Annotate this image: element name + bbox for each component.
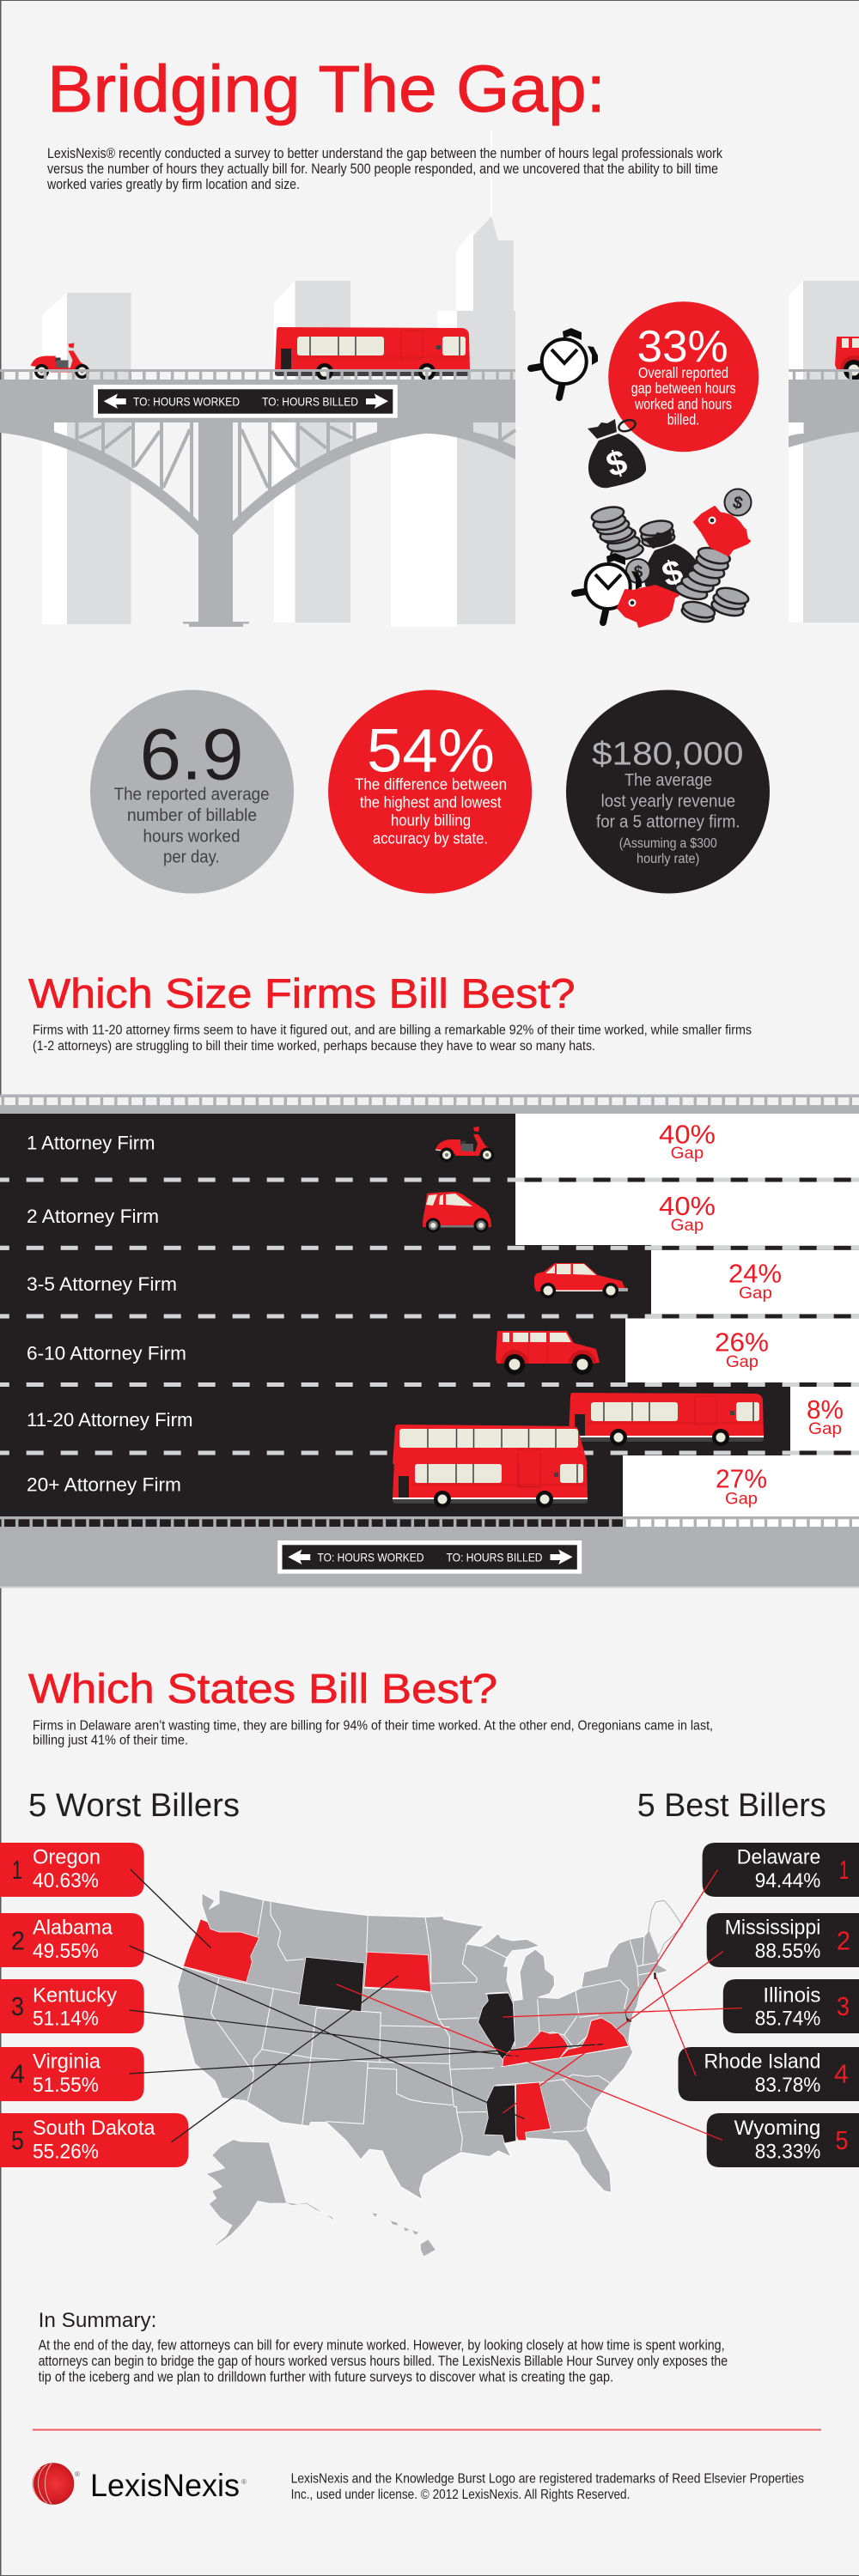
- road sign: hours worked to hours billed: TO: HOURS WORKED: [133, 395, 240, 409]
- stat circle: 54% difference: hourly billing: [391, 811, 471, 829]
- panel: best biller Wyoming: [707, 2113, 859, 2167]
- panel: best biller Illinois: Illinois: [763, 1984, 820, 2007]
- road sign: hours worked to hours billed: TO: HOURS BILLED: [262, 395, 358, 409]
- illustration: bridge right section: [789, 369, 859, 447]
- icon: sedan: [534, 1263, 628, 1298]
- panel: best biller Delaware: [703, 1843, 859, 1897]
- panel: best biller Mississippi: 88.55%: [755, 1940, 820, 1963]
- stat circle: 33% gap: gap between hours: [631, 380, 736, 397]
- icon: alarm clock: [531, 328, 598, 398]
- panel: worst biller Oregon: [0, 1843, 144, 1897]
- stat circle: 6.9 billable hours: per day.: [163, 847, 220, 866]
- stat circle: $180,000 lost revenue: lost yearly revenue: [601, 791, 735, 811]
- text: state summary: [33, 1718, 713, 1748]
- map: state borders: [183, 1900, 659, 2151]
- stat circle: 54% difference: the highest and lowest: [360, 793, 502, 811]
- intro text: [46, 146, 723, 192]
- stat circle: 33% gap: billed.: [667, 411, 699, 428]
- icon: pile of coins, clock, money bag and piggy banks: $: [634, 563, 643, 581]
- illustration: city skyline buildings: [42, 131, 859, 627]
- state: South Dakota: [364, 1952, 431, 1992]
- row labels: 1 Attorney Firm: [27, 1132, 155, 1154]
- gap labels: 8%: [807, 1394, 844, 1425]
- icon: money bag: $: [602, 443, 631, 484]
- stat circle: 54% difference: 54%: [367, 717, 495, 785]
- stat circle: 6.9 billable hours: number of billable: [127, 805, 257, 825]
- panel: worst biller Virginia: [0, 2047, 144, 2101]
- road sign: hours worked to hours billed: TO: HOURS WORKED: [318, 1551, 424, 1564]
- row labels: [27, 1132, 192, 1496]
- panel: best biller Illinois: [723, 1979, 859, 2033]
- illustration: bridge left section: [0, 369, 515, 627]
- logo: LexisNexis: ®: [75, 2470, 80, 2478]
- heading: 5 worst billers: 5 Worst Billers: [28, 1788, 240, 1824]
- stat circle: $180,000 lost revenue: for a 5 attorney firm.: [596, 812, 740, 832]
- stat circle: 6.9 billable hours: [90, 690, 294, 893]
- panel: best biller Mississippi: [707, 1913, 859, 1967]
- text: summary paragraph: [39, 2338, 728, 2385]
- panel: worst biller South Dakota: South Dakota: [33, 2117, 155, 2140]
- icon: scooter: [436, 1127, 495, 1163]
- map: Alaska: [206, 2140, 335, 2246]
- logo globe: [33, 2463, 74, 2505]
- intro text: versus the number of hours they actually bill for. Nearly 500 people responded, and we uncovered that the ability to bill time: [47, 161, 718, 177]
- stat circle: 54% difference: accuracy by state.: [373, 829, 488, 847]
- panel: worst biller Oregon: Oregon: [33, 1846, 101, 1868]
- panel: best biller Delaware: 1: [839, 1855, 849, 1885]
- gap labels: Gap: [671, 1217, 704, 1235]
- top road railing: [0, 1094, 859, 1114]
- panel: best biller Mississippi: 2: [837, 1925, 850, 1956]
- icon: money bag: [588, 418, 646, 488]
- icon: bus on bridge: [275, 327, 470, 380]
- stat circle: 6.9 billable hours: hours worked: [143, 826, 241, 846]
- text: firm size summary: [33, 1024, 752, 1054]
- gap labels: 26%: [715, 1327, 769, 1357]
- state: Kentucky: [503, 2031, 569, 2067]
- panel: worst biller South Dakota: [0, 2113, 188, 2167]
- gap labels: Gap: [725, 1491, 758, 1509]
- row labels: 11-20 Attorney Firm: [27, 1409, 192, 1431]
- heading: in summary: In Summary:: [39, 2309, 156, 2332]
- panel: best biller Mississippi: Mississippi: [725, 1917, 820, 1940]
- gap labels: Gap: [726, 1353, 758, 1371]
- icon: small car: [423, 1192, 491, 1233]
- stat circle: 6.9 billable hours: 6.9: [140, 714, 244, 795]
- state: Oregon: [183, 1919, 259, 1982]
- state: Illinois: [478, 1993, 515, 2059]
- state: Delaware: [624, 2008, 632, 2022]
- panel: best biller Delaware: Delaware: [737, 1846, 820, 1868]
- icon: pile of coins, clock, money bag and piggy banks: $: [658, 553, 687, 594]
- panel: best biller Rhode Island: 83.78%: [755, 2074, 820, 2097]
- panel: worst biller South Dakota: 55.26%: [33, 2141, 99, 2164]
- stat circle: $180,000 lost revenue: $180,000: [592, 737, 744, 773]
- heading: which states bill best: Which States Bill Best?: [28, 1666, 497, 1712]
- panel: worst biller Oregon: 40.63%: [33, 1869, 99, 1893]
- lower road deck: [0, 1516, 859, 1589]
- stat circle: $180,000 lost revenue: [566, 690, 770, 893]
- map: United States: [178, 1890, 683, 2256]
- row labels: 2 Attorney Firm: [27, 1206, 159, 1227]
- gap labels: Gap: [739, 1285, 772, 1303]
- panel: best biller Illinois: 3: [837, 1991, 850, 2021]
- map: Maine outline: [649, 1900, 683, 1956]
- gap labels: Gap: [671, 1145, 704, 1163]
- panel: best biller Delaware: 94.44%: [755, 1869, 820, 1893]
- text: trademark notice: Inc., used under license. © 2012 LexisNexis. All Rights Reserved.: [291, 2488, 630, 2502]
- panel: worst biller Alabama: [0, 1913, 144, 1967]
- text: summary paragraph: tip of the iceberg and we plan to drilldown further with future surveys to discover what is creating the gap.: [39, 2369, 613, 2385]
- gap labels: 40%: [659, 1120, 716, 1150]
- road chart: gap by firm size: [0, 1094, 859, 1589]
- panel: best biller Rhode Island: 4: [834, 2059, 849, 2088]
- stat circle: 54% difference: [328, 690, 532, 893]
- icon: bus: [569, 1393, 764, 1446]
- logo: LexisNexis: LexisNexis: [90, 2468, 240, 2503]
- stat circle: $180,000 lost revenue: (Assuming a $300: [619, 836, 717, 851]
- gap labels: 27%: [716, 1464, 767, 1494]
- icon: pile of coins, clock, money bag and piggy banks: [575, 489, 752, 627]
- row labels: 6-10 Attorney Firm: [27, 1342, 186, 1364]
- panel: best biller Rhode Island: Rhode Island: [704, 2050, 820, 2073]
- panel: worst biller Kentucky: [0, 1979, 144, 2033]
- text: firm size summary: (1-2 attorneys) are struggling to bill their time worked, perhaps because they have to wear so many hats.: [33, 1039, 595, 1054]
- logo: LexisNexis: [33, 2463, 247, 2505]
- map: Hawaii: [372, 2213, 436, 2256]
- stat circle: $180,000 lost revenue: The average: [624, 770, 712, 790]
- state: Virginia: [560, 2018, 629, 2058]
- row bars: hours billed: [0, 1114, 790, 1516]
- gap labels: 40%: [659, 1191, 716, 1221]
- heading: which size firms bill best: Which Size Firms Bill Best?: [28, 970, 576, 1017]
- state: Rhode Island: [654, 1972, 656, 1979]
- text: summary paragraph: attorneys can begin to bridge the gap of hours worked versus hours billed. The LexisNexis Billable Hour Survey only exposes the: [39, 2354, 728, 2369]
- icon: scooter on bridge: [31, 343, 89, 379]
- text: summary paragraph: At the end of the day, few attorneys can bill for every minute worked. However, by looking closely at how time is spent working,: [39, 2338, 725, 2354]
- intro text: worked varies greatly by firm location and size.: [46, 177, 300, 192]
- gap labels: Gap: [808, 1420, 842, 1438]
- row labels: 20+ Attorney Firm: [27, 1473, 181, 1496]
- panel: worst biller Alabama: Alabama: [33, 1917, 113, 1940]
- road sign: hours worked to hours billed: [277, 1540, 582, 1574]
- icon: pile of coins, clock, money bag and piggy banks: $: [731, 493, 745, 513]
- title: Bridging The Gap:: [47, 52, 606, 126]
- heading: 5 best billers: 5 Best Billers: [637, 1788, 826, 1824]
- state: Alabama: [516, 2082, 551, 2141]
- panel: worst biller Kentucky: 3: [11, 1991, 24, 2021]
- panel: worst biller Virginia: 4: [10, 2059, 25, 2088]
- gap labels: [659, 1120, 844, 1509]
- panel: worst biller Kentucky: 51.14%: [33, 2008, 99, 2031]
- panel: best biller Wyoming: 5: [835, 2125, 849, 2155]
- stat circle: 6.9 billable hours: The reported average: [114, 785, 270, 805]
- panel: best biller Illinois: 85.74%: [755, 2008, 820, 2031]
- text: state summary: billing just 41% of their time.: [33, 1734, 188, 1748]
- panel: worst biller South Dakota: 5: [11, 2125, 24, 2155]
- text: firm size summary: Firms with 11-20 attorney firms seem to have it figured out, and are billing a remarkable 92% of their time worked, while smaller firms: [33, 1024, 752, 1038]
- icon: van: [496, 1331, 600, 1375]
- road sign: hours worked to hours billed: TO: HOURS BILLED: [447, 1551, 543, 1564]
- panel: worst biller Kentucky: Kentucky: [33, 1984, 117, 2007]
- icon: double decker bus: [393, 1425, 588, 1508]
- intro text: LexisNexis® recently conducted a survey to better understand the gap between the number of hours legal professionals work: [47, 146, 723, 161]
- icon: partial van on right bridge: [835, 337, 859, 380]
- map base: contiguous states: [178, 1890, 668, 2200]
- row labels: 3-5 Attorney Firm: [27, 1273, 177, 1295]
- state: Mississippi: [484, 2085, 516, 2143]
- stat circle: 54% difference: The difference between: [355, 775, 507, 793]
- panel: worst biller Oregon: 1: [12, 1855, 22, 1885]
- gap labels: 24%: [728, 1258, 782, 1288]
- stat circle: 33% gap: 33%: [637, 322, 728, 372]
- text: state summary: Firms in Delaware aren’t wasting time, they are billing for 94% of their time worked. At the other end, Oregonians came in last,: [33, 1718, 713, 1733]
- stat circle: 33% gap: worked and hours: [634, 396, 732, 413]
- stat circle: 33% gap: [608, 301, 758, 452]
- panel: worst biller Virginia: Virginia: [33, 2050, 101, 2073]
- panel: worst biller Alabama: 49.55%: [33, 1940, 99, 1963]
- stat circle: 33% gap: Overall reported: [638, 364, 728, 381]
- panel: best biller Wyoming: 83.33%: [755, 2141, 820, 2164]
- panel: worst biller Alabama: 2: [11, 1925, 25, 1956]
- panel: best biller Wyoming: Wyoming: [734, 2117, 820, 2140]
- state: Wyoming: [299, 1957, 364, 2012]
- stat circle: $180,000 lost revenue: hourly rate): [637, 852, 699, 866]
- leader lines: [129, 1869, 742, 2142]
- panel: best biller Rhode Island: [679, 2047, 859, 2101]
- panel: worst biller Virginia: 51.55%: [33, 2074, 99, 2097]
- logo: LexisNexis: ®: [241, 2478, 247, 2486]
- text: trademark notice: [291, 2472, 804, 2502]
- road sign: hours worked to hours billed: [94, 385, 398, 418]
